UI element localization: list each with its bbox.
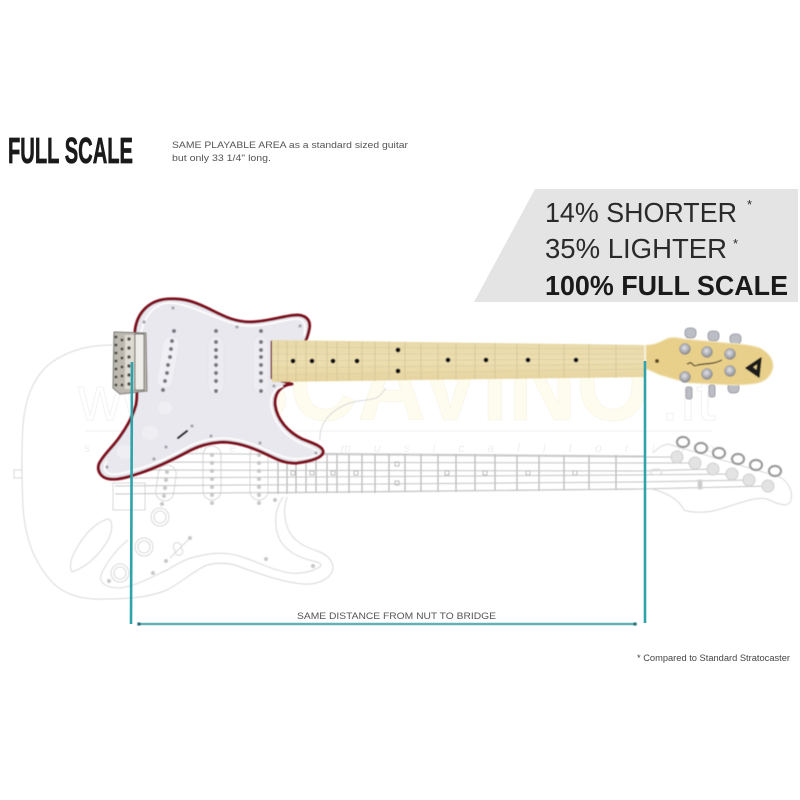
neck pickup bbox=[253, 329, 269, 394]
panel background bbox=[474, 189, 798, 302]
fret markers bbox=[291, 462, 577, 485]
footnote star two: * bbox=[733, 236, 738, 251]
watermark: tagline: s t r u m e n t i m u s i c a l i t o r i n o bbox=[84, 441, 714, 455]
watermark: rule bbox=[85, 430, 712, 432]
horizontal measurement arrow bbox=[137, 622, 637, 626]
string tree bbox=[698, 480, 702, 489]
tremolo bridge bbox=[113, 332, 147, 394]
right teal measurement line bbox=[644, 361, 646, 623]
triangle logo bbox=[746, 358, 761, 377]
control knobs bbox=[111, 508, 169, 582]
selector switch bbox=[170, 538, 190, 558]
subtitle: SAME PLAYABLE AREA as a standard sized guitar bbox=[172, 140, 408, 151]
pickups bbox=[156, 329, 269, 394]
standard bridge bbox=[113, 483, 145, 510]
selector switch slot bbox=[178, 431, 187, 438]
volume and tone knobs bbox=[116, 401, 173, 460]
standard guitar upper horn bbox=[320, 388, 386, 440]
pickguard inner highlight bbox=[104, 303, 318, 474]
bridge pickup bbox=[156, 329, 180, 392]
stat: full scale: 100% FULL SCALE bbox=[545, 270, 788, 301]
nut bbox=[644, 345, 647, 363]
tuning pegs bbox=[671, 451, 774, 492]
footnote star one: * bbox=[747, 197, 752, 212]
standard guitar body outline bbox=[22, 345, 333, 599]
neck strings bbox=[272, 347, 645, 375]
bridge screws and saddles bbox=[114, 336, 131, 386]
standard headstock outline bbox=[652, 444, 791, 512]
watermark bbox=[77, 327, 716, 455]
title: FULL SCALE bbox=[8, 130, 133, 171]
watermark: www prefix: www. bbox=[77, 365, 224, 434]
footnote: * Compared to Standard Stratocaster bbox=[637, 653, 790, 663]
pickup pole pieces bbox=[107, 453, 315, 583]
maple neck bbox=[272, 340, 647, 382]
headstock bbox=[646, 328, 773, 399]
headstock tuner posts bbox=[680, 344, 736, 382]
stat: shorter: 14% SHORTER bbox=[545, 197, 737, 228]
pickguard screws bbox=[105, 306, 318, 469]
strap button bbox=[14, 470, 22, 478]
outline of standard guitar bbox=[14, 345, 791, 599]
compact guitar bbox=[98, 299, 773, 479]
watermark: domain suffix: .it bbox=[660, 365, 716, 434]
tuner rings bbox=[677, 437, 781, 476]
measurement label: SAME DISTANCE FROM NUT TO BRIDGE bbox=[297, 611, 496, 622]
subtitle: but only 33 1/4" long. bbox=[172, 153, 271, 164]
pickguard outline bbox=[101, 497, 321, 588]
fretboard outline bbox=[268, 453, 645, 493]
tuner knobs bbox=[685, 328, 741, 399]
neck position dots bbox=[291, 348, 578, 373]
subtitle bbox=[172, 140, 408, 164]
strings bbox=[115, 453, 768, 494]
truss rod nut bbox=[655, 359, 659, 363]
standard pickups bbox=[155, 446, 268, 502]
frets bbox=[278, 453, 616, 494]
nut-side string retainer bbox=[650, 469, 662, 475]
panel: key stats bbox=[474, 189, 798, 302]
left teal measurement line bbox=[131, 362, 132, 624]
stat: lighter: 35% LIGHTER bbox=[545, 233, 727, 264]
input jack bbox=[70, 519, 112, 572]
watermark: brand name: SCAVINO bbox=[226, 327, 650, 443]
script logo bbox=[687, 360, 722, 366]
neck frets bbox=[278, 341, 616, 382]
middle pickup bbox=[208, 329, 224, 394]
guitar body with red edge bbox=[98, 299, 323, 479]
